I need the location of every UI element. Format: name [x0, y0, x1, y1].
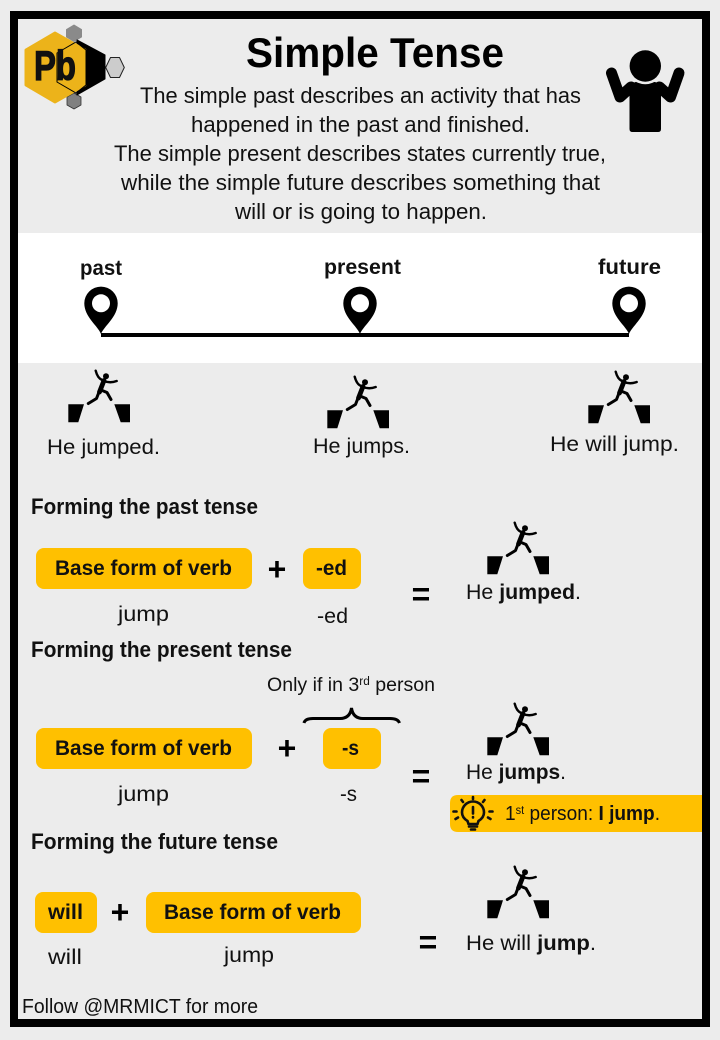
equals: = [412, 576, 430, 612]
box: base form: Base form of verb [164, 901, 341, 924]
callout text: person: [524, 803, 598, 825]
intro text block: happened in the past and finished. [191, 112, 530, 137]
heading: past tense: Forming the past tense [31, 494, 258, 519]
icon: jumper present [327, 377, 389, 428]
icon: present pin [343, 287, 377, 334]
timeline line [101, 333, 629, 337]
caption: jump: jump [117, 602, 169, 626]
label: future: future [598, 256, 661, 279]
logo: Pb hexagons [26, 25, 124, 109]
example: He jumps: He jumps. [313, 434, 410, 458]
heading: future tense: Forming the future tense [31, 829, 278, 854]
caption: -ed: -ed [317, 604, 348, 628]
brace [304, 708, 400, 723]
result: He jumped. [466, 580, 581, 604]
icon: jumper past [68, 371, 130, 422]
logo letters: Pb [34, 42, 76, 89]
box: will [35, 892, 97, 933]
icon: future pin [612, 287, 646, 334]
box: base form: Base form of verb [55, 737, 232, 760]
callout: 1st person [450, 795, 702, 832]
intro text block: will or is going to happen. [234, 199, 487, 224]
intro text block: The simple present describes states currently true, [114, 141, 606, 166]
formula: present tense [36, 675, 566, 806]
box: -ed: -ed [316, 557, 347, 580]
callout text: 1 [505, 803, 516, 825]
formula: future tense [35, 867, 596, 969]
note: only if in 3rd person: rd [359, 676, 370, 688]
heading: present tense: Forming the present tense [31, 637, 292, 662]
callout text: I jump. [598, 803, 660, 825]
plus: + [111, 894, 129, 930]
box: will: will [47, 901, 83, 924]
formula: past tense [36, 523, 581, 628]
caption: jump: jump [223, 943, 274, 967]
footer: Follow @MRMICT for more [22, 996, 258, 1018]
example: He jumped: He jumped. [47, 435, 160, 459]
intro text block: The simple past describes an activity that has [140, 83, 581, 108]
icon: jumper future [588, 372, 650, 423]
note: only if in 3rd person: person [370, 675, 435, 696]
title: Simple Tense [246, 29, 504, 76]
label: present: present [324, 256, 401, 279]
caption: will: will [47, 945, 82, 969]
icon: lightbulb [454, 797, 492, 830]
box: -s: -s [342, 737, 359, 760]
box: base form: Base form of verb [55, 557, 232, 580]
icon: jumper [487, 523, 549, 574]
example: He will jump: He will jump. [550, 432, 679, 456]
result: He will jump. [466, 931, 596, 955]
icon: shrugging person [612, 48, 679, 132]
plus: + [278, 730, 296, 766]
note: only if in 3rd person: Only if in 3 [267, 675, 357, 696]
label: past: past [80, 257, 122, 280]
box: base form [36, 548, 252, 589]
icon: jumper [487, 867, 549, 918]
callout text: st [516, 805, 525, 817]
box: base form [146, 892, 361, 933]
result: He jumps. [466, 760, 566, 784]
caption: -s: -s [340, 782, 357, 806]
equals: = [419, 924, 437, 960]
equals: = [412, 758, 430, 794]
intro text block [114, 83, 606, 224]
intro text block: while the simple future describes something that [120, 170, 600, 195]
box: base form [36, 728, 252, 769]
box: -s [323, 728, 381, 769]
icon: jumper [487, 704, 549, 755]
caption: jump: jump [117, 782, 169, 806]
plus: + [268, 551, 286, 587]
icon: past pin [84, 287, 118, 334]
box: -ed [303, 548, 361, 589]
panel: timeline [18, 233, 702, 363]
